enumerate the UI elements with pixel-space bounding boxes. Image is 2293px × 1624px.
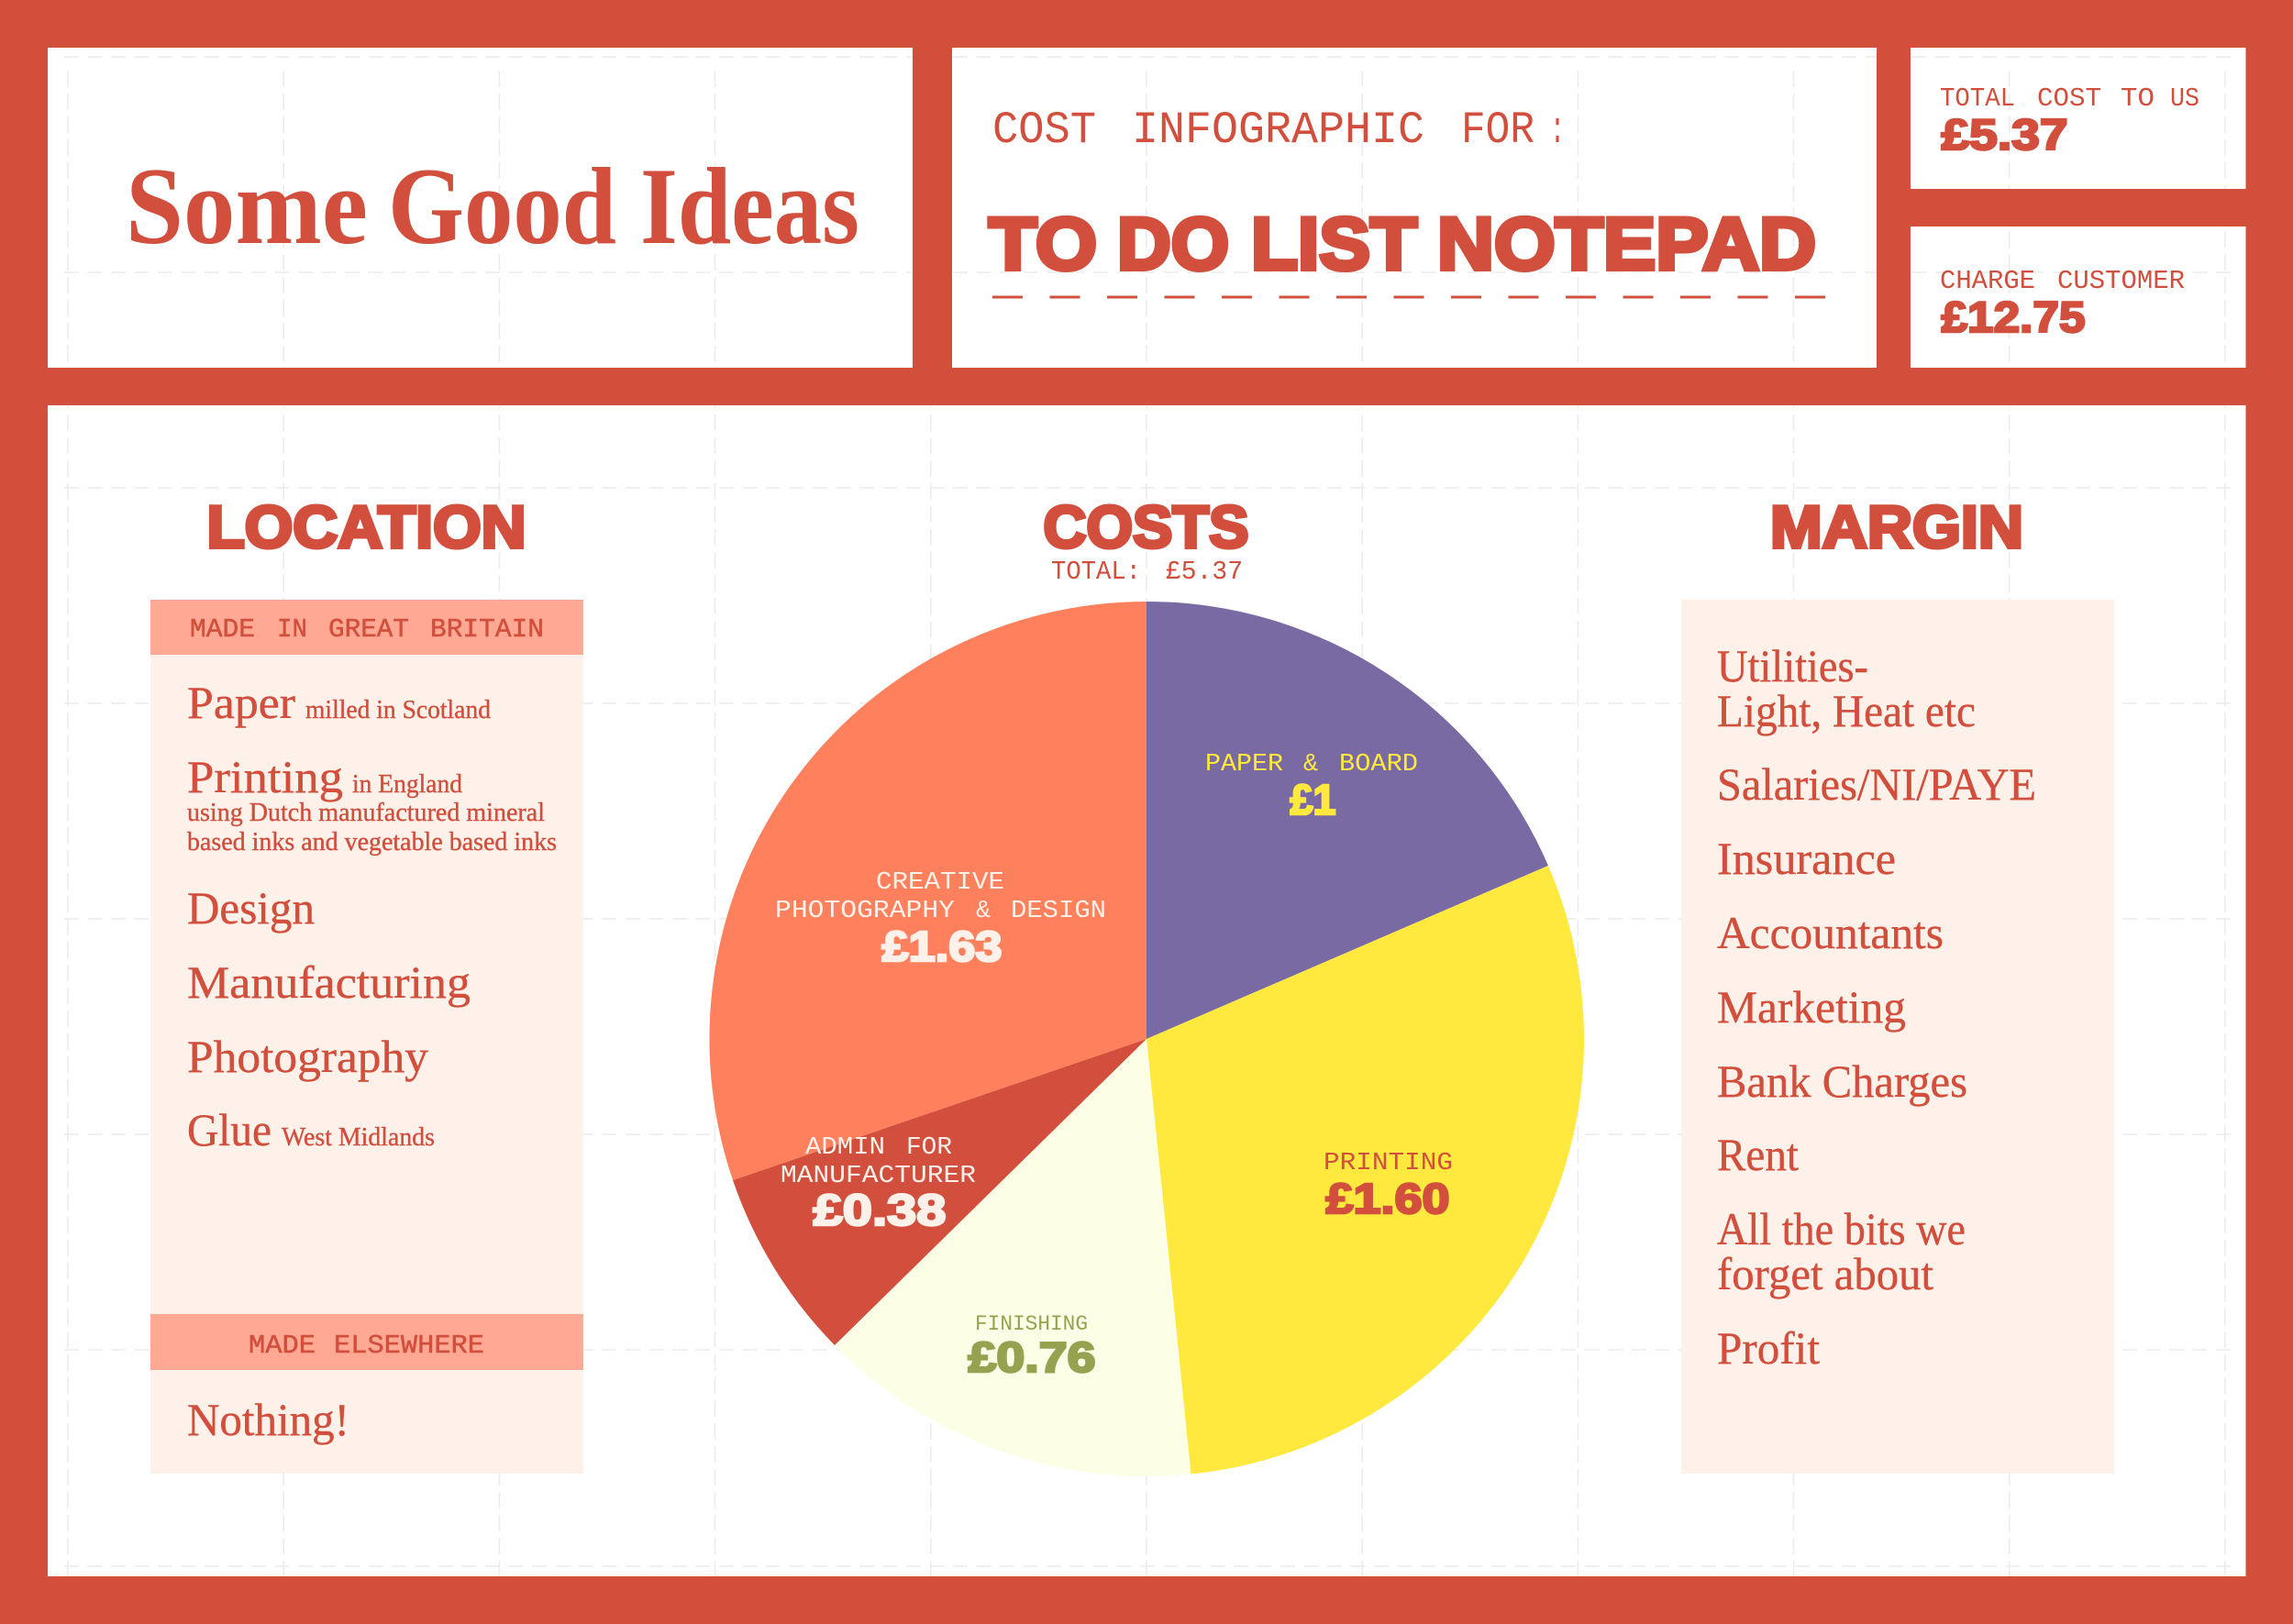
- slice: admin for manufacturer: [733, 1039, 1146, 1345]
- stat: charge customer: £12.75: [1941, 293, 2086, 341]
- label: paper and board: PAPER: [1205, 751, 1283, 779]
- label: admin for manufacturer: [781, 1134, 976, 1235]
- label: paper and board: &: [1303, 751, 1318, 779]
- location list: Paper: [187, 677, 295, 728]
- location list: Glue: [187, 1104, 271, 1155]
- margin list: Marketing: [1717, 981, 1906, 1033]
- heading: to do list notepad: LIST: [1251, 204, 1417, 286]
- heading: margin: MARGIN: [1770, 493, 2023, 560]
- margin list: [1717, 640, 2036, 1374]
- pie chart: [709, 602, 1584, 1476]
- location list: West Midlands: [282, 1122, 435, 1152]
- stat: total cost to us: US: [2170, 83, 2199, 114]
- location list: Photography: [187, 1031, 428, 1082]
- margin list: Insurance: [1717, 833, 1896, 884]
- label: admin for manufacturer: FOR: [906, 1134, 952, 1162]
- margin list: Salaries/NI/PAYE: [1717, 758, 2036, 810]
- label: creative photography and design: &: [976, 898, 991, 925]
- stat: total cost to us: TO: [2121, 83, 2155, 114]
- costs total: [1051, 557, 1243, 587]
- label: cost infographic for: [992, 105, 1565, 156]
- slice: paper and board: [1146, 602, 1548, 1039]
- made in great britain header: MADE: [190, 614, 255, 645]
- made elsewhere text: Nothing!: [187, 1394, 349, 1445]
- panel: location: [150, 493, 583, 1474]
- label: creative photography and design: PHOTOGRAPHY: [775, 898, 955, 925]
- margin card background: [1681, 600, 2114, 1474]
- heading: to do list notepad: TO: [989, 204, 1097, 286]
- label: creative photography and design: CREATIVE: [876, 869, 1004, 897]
- made in great britain header: GREAT: [328, 614, 409, 645]
- made in great britain header: [150, 600, 583, 655]
- made in great britain header: IN: [277, 614, 307, 645]
- margin list: Rent: [1717, 1129, 1799, 1180]
- label: finishing: £0.76: [969, 1333, 1095, 1381]
- stat: charge customer: [1940, 266, 2185, 341]
- location list: Design: [187, 882, 315, 934]
- label: admin for manufacturer: ADMIN: [805, 1134, 885, 1162]
- margin list: Utilities-: [1717, 640, 1868, 691]
- label: cost infographic for: :: [1550, 105, 1565, 156]
- stat: total cost to us: COST: [2037, 83, 2101, 114]
- logo: Some Good Ideas: Some: [126, 145, 368, 267]
- label: finishing: FINISHING: [975, 1312, 1088, 1336]
- location list: milled in Scotland: [305, 695, 491, 724]
- heading: to do list notepad: NOTEPAD: [1437, 204, 1816, 286]
- location list: using Dutch manufactured mineral: [187, 798, 545, 827]
- dashed underline: [992, 295, 1825, 299]
- margin list: Profit: [1717, 1322, 1820, 1374]
- label: printing: [1324, 1150, 1453, 1222]
- panel: margin: [1681, 493, 2114, 1474]
- location list: Manufacturing: [187, 956, 471, 1008]
- section: costs: [709, 493, 1584, 1476]
- heading: to do list notepad: [989, 204, 1816, 286]
- margin list: forget about: [1717, 1248, 1933, 1299]
- label: creative photography and design: [775, 869, 1106, 970]
- margin list: All the bits we: [1717, 1203, 1966, 1254]
- label: cost infographic for: INFOGRAPHIC: [1132, 105, 1424, 156]
- location list: Printing: [187, 751, 343, 802]
- costs total: £5.37: [1166, 557, 1243, 587]
- label: cost infographic for: COST: [992, 105, 1096, 156]
- stat: total cost to us: [1940, 83, 2199, 159]
- margin list: Accountants: [1717, 907, 1944, 958]
- label: paper and board: [1205, 751, 1418, 823]
- location list: in England: [352, 769, 462, 799]
- margin list: Light, Heat etc: [1717, 685, 1976, 736]
- panel: logo: [48, 48, 913, 368]
- panel: main content: [48, 405, 2245, 1576]
- label: creative photography and design: DESIGN: [1011, 898, 1106, 925]
- logo: Some Good Ideas: [126, 145, 859, 267]
- location card background: [150, 600, 583, 1474]
- label: cost infographic for: FOR: [1461, 105, 1534, 156]
- label: printing: PRINTING: [1324, 1150, 1453, 1177]
- stat: total cost to us: £5.37: [1941, 110, 2067, 159]
- made elsewhere header: [150, 1314, 583, 1370]
- label: creative photography and design: £1.63: [882, 922, 1002, 970]
- label: admin for manufacturer: MANUFACTURER: [781, 1163, 976, 1190]
- slice: finishing: [835, 1039, 1191, 1476]
- heading: to do list notepad: DO: [1117, 204, 1229, 286]
- label: admin for manufacturer: £0.38: [813, 1187, 947, 1235]
- slice: creative photography and design: [709, 602, 1146, 1180]
- label: finishing: [969, 1312, 1095, 1381]
- stat: charge customer: CHARGE: [1940, 266, 2035, 296]
- made in great britain header: BRITAIN: [430, 614, 544, 645]
- heading: location: LOCATION: [207, 493, 526, 560]
- label: paper and board: BOARD: [1339, 751, 1418, 779]
- stat: total cost to us: TOTAL: [1940, 83, 2015, 114]
- label: paper and board: £1: [1290, 776, 1335, 823]
- label: printing: £1.60: [1326, 1175, 1449, 1222]
- logo: Some Good Ideas: Good: [388, 145, 616, 267]
- location list: based inks and vegetable based inks: [187, 827, 557, 856]
- panel: charge customer: [1911, 226, 2245, 368]
- location list: [187, 677, 557, 1155]
- costs total: TOTAL:: [1051, 557, 1141, 587]
- stat: charge customer: CUSTOMER: [2057, 266, 2185, 296]
- slice: printing: [1146, 866, 1584, 1475]
- made elsewhere header: ELSEWHERE: [334, 1331, 484, 1361]
- heading: costs: COSTS: [1044, 493, 1249, 560]
- margin list: Bank Charges: [1717, 1055, 1967, 1107]
- panel: product title: [952, 48, 1877, 368]
- panel: total cost: [1911, 48, 2245, 189]
- made elsewhere header: MADE: [249, 1331, 316, 1361]
- logo: Some Good Ideas: Ideas: [640, 145, 859, 267]
